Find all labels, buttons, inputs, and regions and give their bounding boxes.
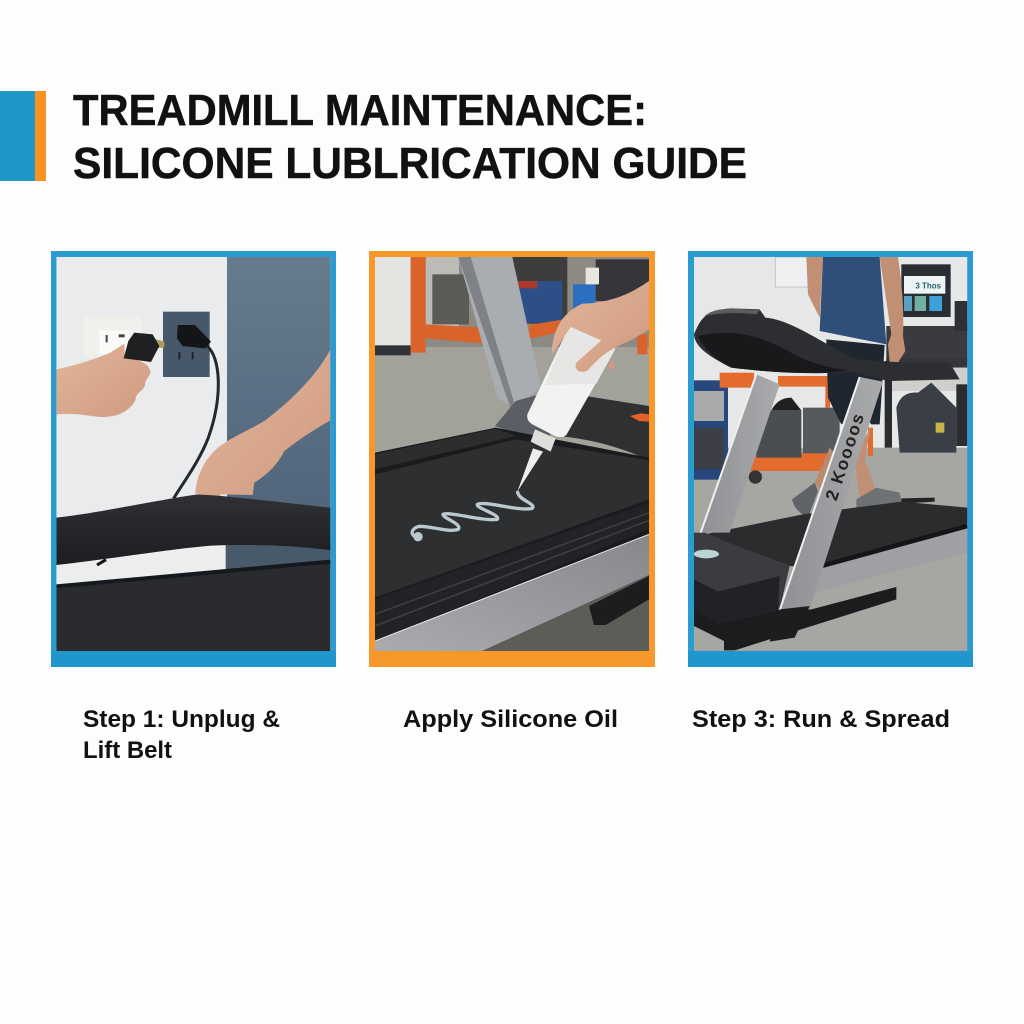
plug in hand [124, 333, 159, 362]
silicone squiggle [412, 492, 533, 540]
lifted belt [56, 494, 330, 565]
bottle nozzle [517, 448, 543, 492]
left upright [701, 374, 780, 533]
bottle collar [531, 429, 556, 452]
frame bottom band [688, 651, 973, 667]
frame bottom band [51, 651, 336, 667]
bottle [527, 325, 615, 437]
orange mark [630, 413, 649, 422]
gold prongs [155, 339, 164, 348]
floor under rail [482, 575, 649, 651]
dark socket plate [163, 312, 210, 377]
runner [792, 257, 905, 537]
orange shelving [411, 257, 647, 354]
upright [458, 257, 541, 409]
workshop machinery [885, 301, 967, 453]
title: TREADMILL MAINTENANCE: [73, 86, 647, 135]
hand holding bottle [552, 281, 649, 372]
back shoe [856, 488, 901, 519]
treadmill belt [705, 502, 967, 568]
right arm [880, 257, 905, 363]
upright brand text: 2 Koooos [821, 411, 868, 503]
fingertip [608, 359, 615, 370]
left side rail [375, 429, 516, 469]
floor [375, 347, 649, 456]
monitor [901, 264, 951, 317]
front shoe [792, 483, 818, 518]
stray cord [97, 560, 106, 565]
motor housing [694, 533, 790, 624]
panel: step 2 apply silicone oil [369, 251, 655, 667]
treadmill underlay [375, 428, 649, 651]
title [73, 86, 747, 188]
caption: step 1: Step 1: Unplug & [83, 706, 280, 733]
caption: step 2: Apply Silicone Oil [403, 706, 618, 733]
right arm and hand [195, 349, 330, 505]
silver side rail [815, 529, 967, 593]
right deck cover [559, 396, 649, 460]
title: SILICONE LUBLRICATION GUIDE [73, 139, 747, 188]
monitor: 3 Thos [915, 281, 942, 290]
shirt [820, 257, 886, 344]
photo: step 1 [56, 257, 330, 651]
caption: step 1: Lift Belt [83, 737, 172, 764]
panel frame: step 1 [51, 251, 336, 667]
storage boxes [749, 398, 840, 484]
console [694, 308, 960, 381]
orange cart [720, 373, 873, 471]
silver side rail [375, 534, 649, 651]
left arm [806, 257, 823, 318]
treadmill belt far end [901, 498, 935, 504]
blue drawer cart [694, 380, 728, 480]
caption: step 3: Step 3: Run & Spread [692, 706, 950, 733]
frame bottom band [369, 651, 655, 667]
lower rail [375, 503, 649, 641]
white wall outlet [99, 330, 130, 354]
header accent bar [0, 91, 46, 181]
upright base [495, 394, 551, 436]
belt [375, 439, 649, 598]
base frame [694, 587, 896, 650]
gap under belt [56, 544, 330, 586]
photo: step 3 [694, 257, 967, 651]
panel frame: step 2 [369, 251, 655, 667]
caption: step 1 [83, 706, 280, 764]
wall poster [775, 257, 809, 287]
upright foot [770, 606, 810, 642]
back leg [854, 426, 875, 497]
panel: step 3 run and spread [688, 251, 973, 667]
lower deck [56, 561, 330, 651]
shorts [826, 339, 885, 424]
front leg [815, 448, 838, 491]
roller bracket [589, 576, 649, 625]
right upright [780, 377, 883, 611]
photo: step 2 [375, 257, 649, 651]
plug in socket [177, 325, 211, 348]
power cord [174, 346, 218, 498]
left hand [56, 344, 150, 417]
panel: step 1 unplug and lift belt [51, 251, 336, 667]
panel frame: step 3 [688, 251, 973, 667]
